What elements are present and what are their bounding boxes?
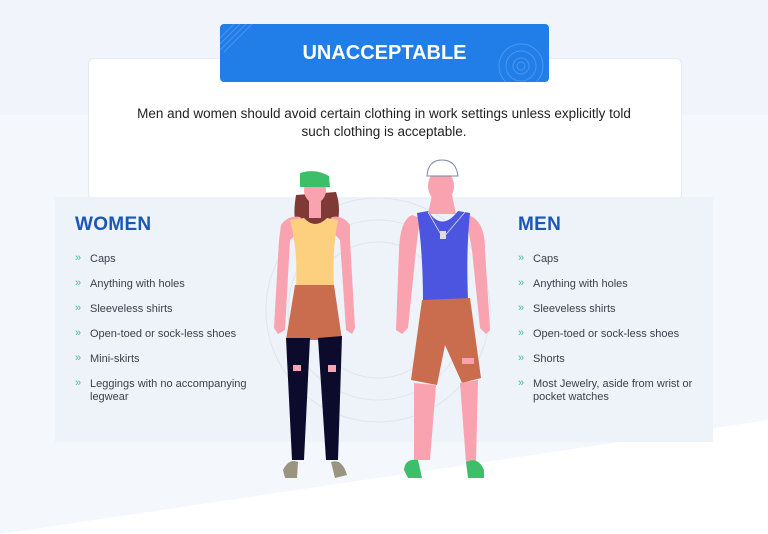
- panel: women: Anything with holes: [90, 278, 185, 290]
- panel: men: Caps: [533, 253, 559, 265]
- panel: women: WOMEN: [75, 214, 151, 235]
- figure: woman: [274, 171, 355, 478]
- title text: UNACCEPTABLE: [302, 42, 467, 64]
- panel: women: Sleeveless shirts: [90, 303, 173, 315]
- panel: lists: [55, 197, 713, 442]
- panel: men: Most Jewelry, aside from wrist or pocket watches: [533, 378, 692, 403]
- panel: women: Caps: [90, 253, 116, 265]
- panel: women: Leggings with no accompanying legwear: [90, 378, 247, 403]
- panel: women: [75, 214, 247, 403]
- panel: men: Anything with holes: [533, 278, 628, 290]
- title banner: [220, 24, 549, 82]
- panel: men: [518, 214, 692, 403]
- panel: women: Mini-skirts: [90, 353, 140, 365]
- panel: women: Open-toed or sock-less shoes: [90, 328, 236, 340]
- panel: men: MEN: [518, 214, 561, 235]
- card: intro: [88, 58, 682, 200]
- panel: men: Sleeveless shirts: [533, 303, 616, 315]
- figure: man: [396, 160, 490, 478]
- intro text: Men and women should avoid certain clothing in work settings unless explicitly told such clothing is acceptable.: [137, 106, 631, 139]
- panel: men: Shorts: [533, 353, 565, 365]
- panel: men: Open-toed or sock-less shoes: [533, 328, 679, 340]
